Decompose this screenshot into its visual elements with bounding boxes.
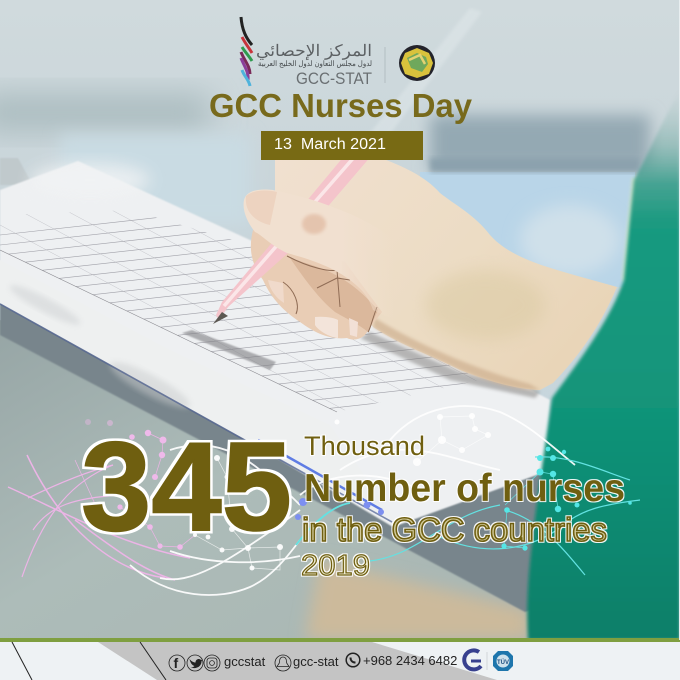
caption: Thousand: Thousand xyxy=(304,431,425,461)
social icons xyxy=(169,653,360,671)
green scrub sleeve xyxy=(527,90,680,640)
date banner: 13 March 2021 xyxy=(274,136,386,153)
icon: GCC emblem xyxy=(399,45,435,81)
nodes xyxy=(85,419,183,550)
caption: year: 2019 xyxy=(301,550,370,582)
icon: ribbon xyxy=(241,17,252,86)
icon: TUV badge xyxy=(493,651,513,671)
logo: GCC-STAT: المركز الإحصائي xyxy=(256,43,372,60)
paper form xyxy=(0,158,550,527)
logo: GCC-STAT: GCC-STAT xyxy=(296,69,372,88)
big number 345: 345 xyxy=(81,416,292,557)
icon: TUV badge: TÜV xyxy=(497,659,509,666)
cyan curves xyxy=(296,457,640,575)
form rows xyxy=(0,218,468,408)
footer: gcc-stat xyxy=(293,654,339,669)
icon: quality mark xyxy=(464,650,481,669)
date banner xyxy=(261,131,423,160)
hand shadow on paper xyxy=(360,332,540,398)
footer xyxy=(0,638,680,680)
pink curves xyxy=(8,455,190,580)
footer: +968 2434 6482 xyxy=(363,653,457,668)
hex net lines xyxy=(195,416,488,570)
caption: in the GCC countries: in the GCC countries xyxy=(302,511,607,548)
pen xyxy=(213,8,482,324)
clipboard edge xyxy=(0,303,550,612)
network graphic xyxy=(8,406,640,595)
clip on the clipboard xyxy=(0,158,30,185)
footer: gccstat xyxy=(224,654,266,669)
logo: GCC-STAT: لدول مجلس التعاون لدول الخليج العربية xyxy=(258,59,372,68)
logo: GCC-STAT xyxy=(241,17,435,88)
hand xyxy=(213,8,617,390)
title: GCC Nurses Day xyxy=(209,87,473,124)
white curves xyxy=(130,406,575,595)
caption: Number of nurses: Number of nurses xyxy=(304,467,625,510)
fingers xyxy=(251,230,382,340)
blue glow along paper edge xyxy=(258,440,382,510)
thumb xyxy=(244,189,395,320)
lower blurred surface xyxy=(0,320,540,640)
footer: f xyxy=(174,655,178,671)
